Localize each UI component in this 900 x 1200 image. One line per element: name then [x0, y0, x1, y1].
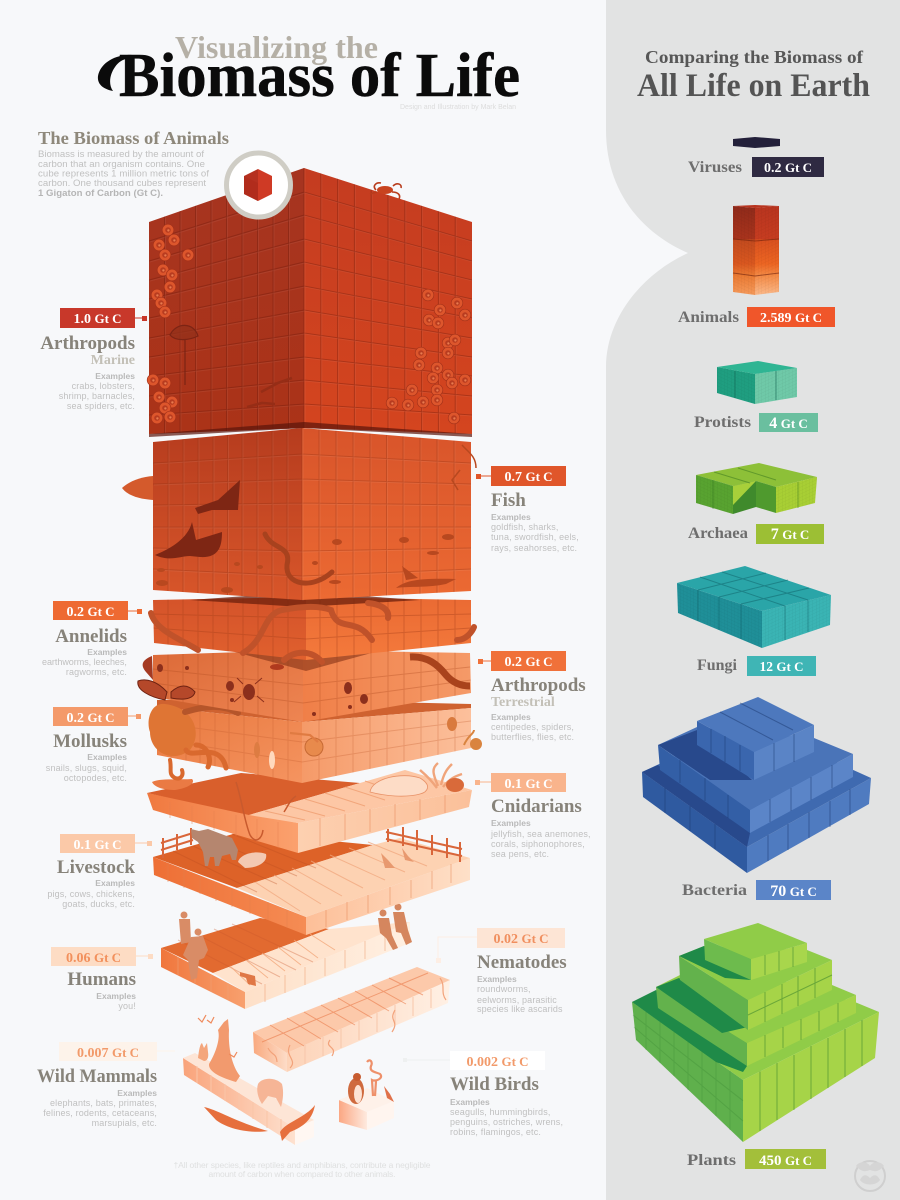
icon: cow — [191, 829, 238, 866]
label: fish: tuna, swordfish, eels, — [491, 532, 579, 542]
block: wild birds cubes — [339, 1060, 394, 1130]
label: arthropods marine: shrimp, barnacles, — [59, 391, 135, 401]
icon: eel — [265, 534, 332, 583]
icon: lobsters — [247, 378, 292, 407]
label: wild mammals: elephants, bats, primates, — [50, 1098, 157, 1108]
label: mollusks: Mollusks — [53, 731, 127, 752]
block: annelids — [151, 592, 474, 665]
label: livestock: Examples — [95, 878, 135, 888]
label: nematodes: eelworms, parasitic — [477, 995, 557, 1005]
label: wild birds: seagulls, hummingbirds, — [450, 1107, 550, 1117]
label: livestock: goats, ducks, etc. — [62, 899, 135, 909]
label: fish — [476, 466, 579, 553]
label: wild birds: penguins, ostriches, wrens, — [450, 1117, 563, 1127]
block: nematodes slab — [253, 967, 450, 1072]
icon: viruses slab — [733, 137, 780, 148]
scale cube callout — [226, 153, 290, 217]
label: annelids: 0.2 Gt C — [66, 604, 115, 620]
icon: spider and insects — [157, 664, 368, 716]
icon: plants pyramid — [632, 923, 879, 1142]
bacteria bar: 70 Gt C — [770, 883, 817, 900]
viruses bar — [688, 137, 824, 177]
icon: barnacles — [147, 224, 471, 424]
title: Visualizing the — [175, 29, 378, 65]
icon: flamingo — [367, 1060, 381, 1096]
label: fish: rays, seahorses, etc. — [491, 543, 577, 553]
label: wild birds: Wild Birds — [450, 1074, 539, 1095]
label: cnidarians: jellyfish, sea anemones, — [490, 829, 591, 839]
label: mollusks: snails, slugs, squid, — [46, 763, 127, 773]
fungi bar: Fungi — [697, 657, 738, 674]
label: mollusks: 0.2 Gt C — [66, 710, 115, 726]
title: Biomass of Life — [119, 42, 520, 110]
icon: shark right — [396, 566, 456, 588]
label: cnidarians: Examples — [491, 818, 531, 828]
icon: people left — [179, 912, 208, 980]
icon: slug and snail — [254, 717, 482, 769]
block: terrestrial arthropods — [138, 650, 471, 725]
intro text block — [38, 128, 229, 199]
intro text block: Biomass is measured by the amount of — [38, 149, 204, 160]
label: cnidarians: sea pens, etc. — [491, 849, 549, 859]
block: humans slab — [161, 904, 412, 1009]
icon: jellyfish — [370, 776, 428, 796]
block: marine arthropods cube — [147, 160, 473, 441]
panel heading: All Life on Earth — [637, 68, 870, 104]
label: mollusks: octopodes, etc. — [64, 773, 127, 783]
intro text block: carbon. One thousand cubes represent — [38, 178, 206, 189]
icon: butterfly — [138, 656, 195, 700]
icon: shark left — [122, 476, 153, 500]
panel heading — [637, 47, 870, 104]
block: fish — [122, 425, 476, 601]
panel heading: Comparing the Biomass of — [645, 47, 864, 67]
block: mollusks — [149, 700, 482, 785]
label: arthropods terrestrial: 0.2 Gt C — [504, 654, 553, 670]
fungi bar — [677, 566, 831, 676]
icon: fungi block — [677, 566, 831, 648]
label: arthropods marine: Marine — [91, 353, 135, 368]
logo — [855, 1161, 885, 1191]
icon: coral — [420, 763, 462, 788]
icon: nematode squiggles — [268, 978, 446, 1068]
label: wild mammals: Wild Mammals — [37, 1066, 157, 1087]
icon: small birds — [198, 1015, 237, 1057]
intro text block: carbon that an organism contains. One — [38, 159, 205, 170]
protists bar — [694, 361, 818, 432]
label: nematodes: Nematodes — [477, 952, 567, 973]
protists bar: 4 Gt C — [769, 415, 808, 432]
icon: archaea block — [696, 463, 817, 514]
label: mollusks — [46, 707, 141, 783]
block: livestock slab — [153, 827, 470, 935]
icon: protists cube — [717, 361, 797, 404]
label: wild mammals: felines, rodents, cetaceans, — [43, 1108, 157, 1118]
label: fish: Fish — [491, 490, 526, 511]
icon: penguin — [348, 1073, 364, 1104]
icon: rabbit — [198, 1043, 208, 1061]
icon: dolphins — [204, 1105, 315, 1141]
footnote: †All other species, like reptiles and amphibians, contribute a negligible — [174, 1160, 431, 1170]
label: annelids: ragworms, etc. — [66, 667, 127, 677]
label: wild birds — [403, 1051, 563, 1137]
label: fish: 0.7 Gt C — [504, 469, 553, 485]
icon: anemone — [446, 778, 464, 792]
label: cnidarians: 0.1 Gt C — [504, 776, 553, 792]
footnote: amount of carbon when compared to other animals. — [208, 1169, 396, 1179]
icon: unit cube — [244, 169, 272, 201]
viruses bar: Viruses — [688, 159, 742, 176]
archaea bar — [688, 463, 824, 544]
label: wild mammals: Examples — [117, 1088, 157, 1098]
label: livestock: pigs, cows, chickens, — [47, 889, 135, 899]
icon: giraffe — [209, 1019, 240, 1082]
icon: worms — [151, 603, 474, 662]
label: wild mammals: marsupials, etc. — [92, 1118, 157, 1128]
label: annelids: earthworms, leeches, — [42, 657, 127, 667]
fungi bar: 12 Gt C — [760, 659, 803, 674]
animals bar: Animals — [678, 309, 739, 326]
label: wild birds: Examples — [450, 1097, 490, 1107]
label: cnidarians: Cnidarians — [491, 796, 582, 817]
bacteria bar — [642, 697, 871, 900]
label: mollusks: Examples — [87, 752, 127, 762]
intro text block: 1 Gigaton of Carbon (Gt C). — [38, 188, 163, 199]
label: nematodes: species like ascarids — [477, 1004, 563, 1014]
label: humans: 0.06 Gt C — [66, 950, 121, 966]
label: nematodes: roundworms, — [477, 984, 531, 994]
icon: centipede — [410, 657, 470, 686]
label: livestock: 0.1 Gt C — [73, 837, 122, 853]
label: arthropods terrestrial: Terrestrial — [491, 695, 555, 710]
label: humans: Humans — [67, 969, 136, 990]
intro text block: The Biomass of Animals — [38, 128, 229, 148]
label: nematodes: 0.02 Gt C — [493, 931, 549, 947]
animals bar: 2.589 Gt C — [760, 310, 822, 326]
label: wild mammals — [37, 1042, 175, 1128]
label: annelids: Examples — [87, 647, 127, 657]
plants bar — [632, 923, 879, 1169]
animals bar — [678, 205, 835, 327]
label: humans: you! — [118, 1001, 136, 1011]
label: arthropods marine — [40, 308, 147, 411]
label: nematodes — [436, 928, 567, 1014]
protists bar: Protists — [694, 414, 751, 431]
icon: bacteria pyramid — [642, 697, 871, 873]
label: arthropods terrestrial: Examples — [491, 712, 531, 722]
icon: small animal — [240, 972, 256, 986]
label: wild birds: 0.002 Gt C — [466, 1054, 529, 1070]
label: annelids — [42, 601, 142, 677]
archaea bar: Archaea — [688, 525, 748, 542]
label: fish: goldfish, sharks, — [491, 522, 559, 532]
icon: siphonophore tentacle — [236, 782, 296, 840]
comparison panel background — [606, 0, 900, 1200]
label: wild mammals: 0.007 Gt C — [77, 1045, 139, 1061]
block: cnidarians slab — [147, 763, 472, 853]
label: cnidarians: corals, siphonophores, — [491, 839, 585, 849]
icon: octopus — [149, 704, 238, 779]
label: humans — [51, 947, 153, 1011]
label: livestock — [47, 834, 152, 909]
label: arthropods terrestrial: Arthropods — [491, 675, 586, 696]
label: cnidarians — [475, 773, 591, 859]
label: arthropods marine: Examples — [95, 371, 135, 381]
plants bar: 450 Gt C — [759, 1153, 812, 1169]
label: nematodes: Examples — [477, 974, 517, 984]
viruses bar: 0.2 Gt C — [764, 160, 812, 176]
icon: fence left — [161, 828, 193, 858]
icon: manta rays — [155, 480, 240, 558]
label: livestock: Livestock — [57, 857, 135, 878]
block: wild mammals row — [183, 1015, 315, 1145]
icon: small fish — [156, 445, 476, 593]
intro text block: cube represents 1 million metric tons of — [38, 168, 209, 180]
label: fish: Examples — [491, 512, 531, 522]
icon: animals column — [733, 205, 779, 295]
icon: pig — [238, 852, 266, 868]
label: arthropods terrestrial: butterflies, flies, etc. — [491, 732, 574, 742]
label: wild birds: robins, flamingos, etc. — [450, 1127, 541, 1137]
label: humans: Examples — [96, 991, 136, 1001]
label: arthropods marine: 1.0 Gt C — [73, 311, 122, 327]
credit line: Design and Illustration by Mark Belan — [400, 102, 516, 111]
label: arthropods marine: sea spiders, etc. — [67, 401, 135, 411]
footnote — [174, 1160, 431, 1179]
label: arthropods marine: Arthropods — [40, 333, 135, 354]
plants bar: Plants — [687, 1152, 736, 1169]
archaea bar: 7 Gt C — [771, 526, 809, 543]
label: arthropods terrestrial — [478, 651, 586, 742]
bacteria bar: Bacteria — [682, 882, 747, 899]
label: arthropods marine: crabs, lobsters, — [72, 381, 135, 391]
icon: gorilla — [257, 1079, 283, 1107]
icon: horseshoe crab — [170, 325, 198, 385]
icon: coral left — [152, 779, 193, 790]
icon: fence right — [386, 827, 462, 862]
icon: small bird — [384, 1086, 394, 1102]
label: arthropods terrestrial: centipedes, spiders, — [491, 722, 574, 732]
icon: people right — [378, 904, 412, 950]
icon: crab — [370, 183, 401, 199]
icon: chickens — [381, 848, 414, 868]
label: annelids: Annelids — [55, 626, 127, 647]
